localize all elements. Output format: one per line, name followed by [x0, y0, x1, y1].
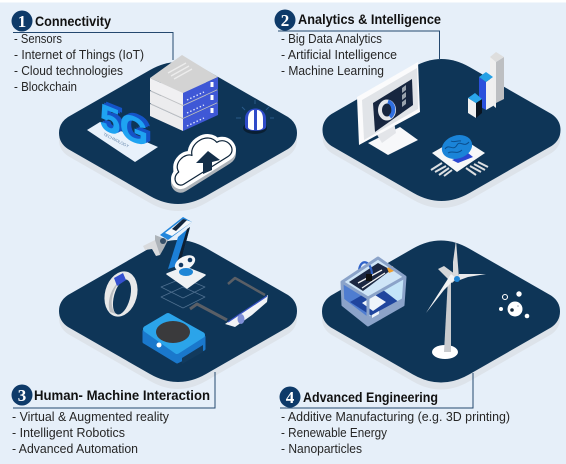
number badge 1: 1: [18, 12, 26, 31]
number badge 2: [274, 10, 296, 30]
icon: 5G badge: 5G: [104, 93, 152, 153]
list 4: - Renewable Energy: [281, 426, 388, 440]
connector line 4: [280, 373, 473, 408]
icon: robot arm: [143, 217, 205, 288]
list 4: - Additive Manufacturing (e.g. 3D printing): [281, 410, 510, 424]
icon: 5G badge: 5G: [100, 95, 148, 155]
platform 2: [322, 59, 560, 208]
icon: wind turbine: [426, 240, 486, 359]
icon: mobile robot: [144, 316, 204, 364]
icon: server stack: [150, 55, 218, 131]
icon: 5G badge: 5G: [102, 94, 150, 154]
heading 1: Connectivity: [35, 13, 111, 29]
icon: 3D printer: [342, 258, 405, 325]
icon: monitor dashboard: [357, 62, 420, 155]
icon: 5G badge: [87, 93, 158, 162]
heading 2: Analytics & Intelligence: [298, 11, 441, 27]
list 2: - Big Data Analytics: [281, 32, 382, 46]
heading 4: Advanced Engineering: [303, 389, 438, 405]
list 4: - Nanoparticles: [281, 442, 362, 456]
list 3: - Advanced Automation: [12, 442, 138, 456]
connector line 1: [13, 32, 173, 60]
number badge 3: [12, 384, 32, 406]
icon: IoT sensor: [236, 100, 274, 134]
icon: bar chart: [468, 52, 504, 118]
list 3: - Intelligent Robotics: [12, 426, 125, 440]
list 1: - Blockchain: [14, 80, 77, 94]
icon: AI brain chip: [431, 131, 488, 176]
platform 1: [59, 62, 297, 211]
number badge 1: [12, 10, 32, 32]
icon: layered plates: [161, 278, 205, 308]
connector line 3: [13, 372, 215, 408]
list 3: [12, 410, 170, 456]
list 1: - Sensors: [14, 32, 62, 46]
icon: smart glasses: [190, 278, 268, 327]
panel: connectivity: [12, 10, 297, 211]
list 2: - Machine Learning: [281, 64, 384, 78]
list 1: - Internet of Things (IoT): [14, 48, 144, 62]
panel: human-machine interaction: [12, 217, 297, 456]
heading 3: Human- Machine Interaction: [34, 387, 210, 403]
number badge 3: 3: [18, 386, 26, 405]
panel: analytics and intelligence: [274, 10, 560, 208]
number badge 2: 2: [281, 11, 289, 30]
platform 4: [322, 240, 560, 390]
platform 3: [59, 240, 297, 389]
number badge 4: [280, 386, 300, 408]
list 4: [281, 410, 510, 456]
icon: cloud upload: [162, 128, 236, 191]
list 1: - Cloud technologies: [14, 64, 123, 78]
connector line 2: [278, 31, 440, 60]
icon: smart ring: [100, 268, 142, 320]
icon: nanoparticles: [499, 291, 529, 318]
number badge 4: 4: [286, 388, 295, 407]
list 2: - Artificial Intelligence: [281, 48, 397, 62]
icon: 5G badge: TECHNOLOGY: [103, 131, 130, 149]
panel: advanced engineering: [280, 240, 560, 456]
list 2: [281, 32, 397, 78]
list 3: - Virtual & Augmented reality: [12, 410, 170, 424]
list 1: [14, 32, 144, 94]
